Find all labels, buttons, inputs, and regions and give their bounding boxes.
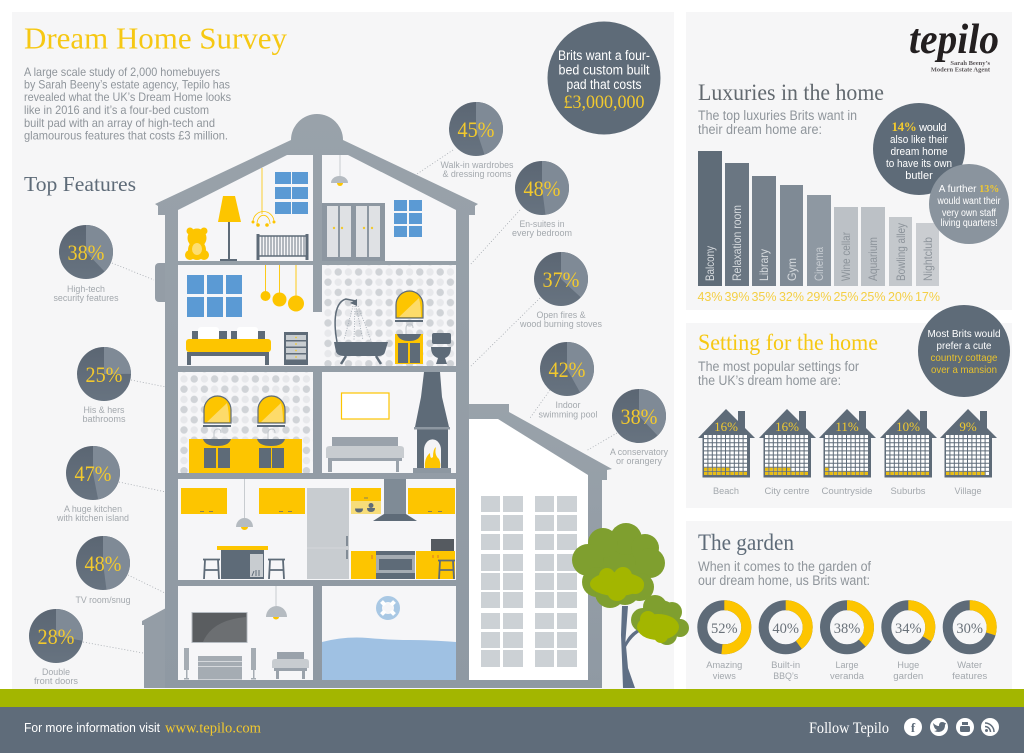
donut: water features: Water	[957, 660, 982, 670]
nursery: window	[275, 172, 308, 214]
tv room: speakers and cabinet	[184, 648, 256, 680]
kitchen: island	[217, 546, 268, 579]
pie: bathrooms: bathrooms	[82, 414, 126, 424]
callout: butler: 14% would	[892, 119, 946, 134]
donut: amazing views: 52%	[711, 621, 738, 637]
house icon: beach	[698, 409, 755, 496]
callout: country cottage	[918, 305, 1010, 397]
pie: swimming pool: 42%	[548, 357, 586, 382]
pie: wardrobes: Walk-in wardrobes	[440, 160, 514, 170]
intro text	[24, 65, 231, 142]
pie: swimming pool: swimming pool	[538, 410, 598, 420]
pie: bathrooms: His & hers	[84, 405, 125, 415]
donut: water features	[948, 605, 992, 681]
intro text: like in 2016 and it’s a four-bed custom	[24, 103, 209, 117]
text: garden intro: our dream home, us Brits want:	[698, 573, 870, 588]
kitchen: wall cabinets	[181, 488, 455, 514]
double bathroom: mirrors	[203, 396, 285, 427]
pie: open fires: Open fires &	[536, 310, 586, 320]
house	[142, 114, 612, 688]
pie: conservatory	[586, 389, 668, 466]
bar chart: luxuries: Wine cellar	[839, 232, 853, 281]
rooms	[178, 155, 456, 680]
logo: tepilo	[909, 17, 999, 63]
tree highlights	[590, 567, 679, 643]
callout: staff quarters	[929, 164, 1009, 244]
tv room: television	[192, 612, 247, 642]
pie: security: 38%	[68, 240, 104, 265]
callout: country cottage: prefer a cute	[936, 340, 992, 352]
pie: kitchen: with kitchen island	[56, 513, 129, 523]
living room: wood burner	[413, 372, 451, 473]
living room: picture	[342, 393, 389, 419]
extension building	[469, 404, 612, 688]
pie: tv room: 48%	[84, 551, 122, 576]
donut: huge garden: 34%	[895, 621, 922, 637]
pie: wardrobes: & dressing rooms	[442, 169, 512, 179]
pie: security	[54, 225, 154, 303]
bar chart: luxuries: 25%	[860, 290, 886, 304]
donut: water features: features	[952, 671, 988, 681]
donut: huge garden: Huge	[897, 660, 919, 670]
donut: bbq	[764, 605, 808, 681]
attic: pendant light	[331, 155, 348, 186]
pie: open fires: 37%	[542, 267, 580, 292]
double bathroom: vanity	[189, 429, 302, 473]
text: setting intro	[698, 359, 859, 388]
pie: kitchen: 47%	[74, 461, 112, 486]
donut: huge garden: garden	[893, 671, 923, 681]
callout: butler	[873, 103, 965, 195]
pie: tv room: TV room/snug	[76, 595, 130, 605]
pie: bathrooms: 25%	[86, 362, 122, 387]
bar chart: luxuries: 25%	[833, 290, 859, 304]
bedroom: hanging lights	[260, 265, 304, 312]
callout: country cottage: over a mansion	[931, 364, 997, 376]
pie: front doors	[29, 609, 143, 686]
text: luxuries intro: their dream home are:	[698, 122, 822, 137]
nursery: cot	[258, 234, 307, 260]
bar chart: luxuries: Nightclub	[921, 237, 935, 281]
pie: wardrobes	[417, 102, 514, 179]
donut: amazing views: Amazing	[706, 660, 742, 670]
bedroom: window	[187, 275, 242, 317]
icon: rss	[981, 718, 999, 736]
tv room: armchair	[272, 652, 309, 679]
annex and alarm box	[142, 263, 169, 688]
donut: bbq: BBQ’s	[773, 671, 799, 681]
bar chart: luxuries: Cinema	[812, 247, 826, 281]
living room: sofa	[326, 437, 404, 472]
bathroom: mirror	[395, 291, 423, 322]
callout: staff quarters: A further 13%	[939, 184, 999, 195]
bar chart: luxuries: 35%	[751, 290, 777, 304]
house icon: countryside: Countryside	[822, 486, 872, 496]
pie: front doors: 28%	[38, 624, 74, 649]
house icon: village	[940, 409, 997, 496]
pie: en-suites: En-suites in	[520, 219, 564, 229]
pie: open fires	[470, 252, 602, 367]
callout: three million: pad that costs	[566, 77, 642, 92]
bar chart: luxuries: Bowling alley	[894, 223, 908, 281]
callout: three million: £3,000,000	[564, 92, 644, 113]
icon: facebook	[904, 718, 922, 736]
pie: front doors: front doors	[34, 676, 79, 686]
text: luxuries intro	[698, 108, 857, 137]
attic: window	[394, 200, 422, 237]
bar chart: luxuries: 20%	[888, 290, 913, 304]
callout: butler: butler	[905, 170, 933, 182]
pie: bathrooms	[77, 347, 166, 424]
donut: bbq: Built-in	[771, 660, 800, 670]
bar chart: luxuries: Gym	[785, 258, 799, 281]
house structure	[155, 114, 478, 688]
bar chart: luxuries	[697, 151, 940, 304]
pie: open fires: wood burning stoves	[519, 319, 602, 329]
intro text: A large scale study of 2,000 homebuyers	[24, 65, 220, 79]
pool: lifebuoy	[379, 599, 397, 617]
pie: kitchen: A huge kitchen	[64, 504, 122, 514]
house icon: countryside: 11%	[835, 419, 859, 434]
panel: garden background	[686, 521, 1012, 690]
text: garden intro: When it comes to the garden of	[698, 559, 871, 574]
bar chart: luxuries: 29%	[806, 290, 832, 304]
nursery: mobile	[252, 168, 276, 227]
footer: follow text: Follow Tepilo	[809, 720, 889, 737]
bar chart: luxuries: Aquarium	[866, 237, 880, 281]
icon: facebook: f	[911, 720, 916, 735]
pie: swimming pool: Indoor	[556, 400, 580, 410]
callout: staff quarters: very own staff	[942, 208, 996, 219]
panel: luxuries background	[686, 12, 1012, 310]
bar chart: luxuries: Relaxation room	[730, 205, 744, 281]
pie: conservatory: A conservatory	[610, 447, 668, 457]
house icon: village: 9%	[959, 419, 977, 434]
donut: amazing views: views	[713, 671, 736, 681]
text: setting intro: The most popular settings for	[698, 359, 859, 374]
bar chart: luxuries: Balcony	[703, 246, 717, 281]
heading: luxuries: Luxuries in the home	[698, 80, 884, 105]
kitchen: fridge	[307, 488, 349, 579]
donut: veranda: 38%	[834, 621, 860, 637]
logo: Modern Estate Agent	[931, 66, 991, 74]
donut: water features: 30%	[956, 621, 983, 637]
callout: country cottage: Most Brits would	[928, 328, 1001, 340]
house icon: beach: 16%	[714, 419, 738, 434]
bedroom: bed	[186, 327, 271, 365]
pie: swimming pool	[530, 342, 598, 420]
kitchen: stools	[203, 560, 285, 579]
callout: three million	[548, 22, 660, 134]
pool: water	[322, 638, 456, 680]
house icon: city centre: 16%	[775, 419, 799, 434]
callout: butler: also like their	[890, 134, 948, 146]
pie: security: High-tech	[67, 284, 105, 294]
heading: top features: Top Features	[24, 172, 136, 196]
intro text: built pad with an array of high-tech and	[24, 116, 215, 130]
callout: three million: Brits want a four-	[558, 48, 650, 63]
bedroom: drawers	[284, 332, 308, 365]
text: garden intro	[698, 559, 871, 588]
house icon: city centre	[759, 409, 816, 496]
pie: front doors: Double	[42, 667, 70, 677]
panel: setting background	[686, 323, 1012, 508]
pie: en-suites	[470, 161, 572, 265]
pie: conservatory: 38%	[620, 404, 658, 429]
heading: setting: Setting for the home	[698, 330, 878, 355]
text: setting intro: the UK’s dream home are:	[698, 373, 841, 388]
nursery: teddy bear	[185, 228, 209, 260]
icon: twitter	[930, 718, 948, 736]
kitchen: oven and units	[351, 539, 455, 579]
bar chart: luxuries: 17%	[915, 290, 940, 304]
donut: veranda: veranda	[830, 671, 864, 681]
house icon: suburbs: Suburbs	[890, 486, 926, 496]
house icon: city centre: City centre	[764, 486, 810, 496]
callout: country cottage: country cottage	[930, 352, 998, 364]
pie: conservatory: or orangery	[616, 456, 662, 466]
bathroom: vanity unit	[395, 324, 423, 364]
callout: staff quarters: living quarters!	[940, 218, 998, 229]
bathroom: bath and shower	[334, 299, 388, 364]
nursery: lamp	[218, 196, 241, 261]
callout: staff quarters: would want their	[937, 196, 1001, 207]
footer: website text	[24, 720, 262, 736]
bar chart: luxuries: 39%	[724, 290, 750, 304]
house icon: suburbs: 10%	[896, 419, 920, 434]
house icon: suburbs	[880, 409, 937, 496]
pie: tv room	[76, 536, 165, 605]
pie: en-suites: 48%	[524, 176, 560, 201]
donut: huge garden	[886, 605, 930, 681]
pie: security: security features	[54, 293, 119, 303]
callout: butler: dream home	[890, 146, 948, 158]
attic: wardrobes	[322, 203, 385, 261]
kitchen: pendant light	[236, 479, 253, 530]
donut: veranda: Large	[836, 660, 858, 670]
callout: butler: to have its own	[886, 158, 952, 170]
footer bar	[0, 707, 1024, 753]
house icon: countryside	[819, 409, 876, 496]
tree foliage	[572, 523, 689, 645]
pie: wardrobes: 45%	[458, 117, 494, 142]
tree	[572, 523, 689, 688]
bar chart: luxuries: 32%	[779, 290, 804, 304]
bar chart: luxuries: 43%	[697, 290, 723, 304]
ground strip	[0, 689, 1024, 707]
text: luxuries intro: The top luxuries Brits want in	[698, 108, 857, 123]
heading: garden: The garden	[698, 530, 794, 555]
donut: veranda	[825, 605, 869, 681]
bar chart: luxuries: Library	[757, 249, 771, 281]
house icon: beach: Beach	[713, 486, 739, 496]
footer: website text: www.tepilo.com	[165, 720, 262, 736]
tv room: pendant light	[266, 586, 287, 620]
title: Dream Home Survey	[24, 20, 287, 56]
pie: kitchen	[56, 446, 166, 523]
house icon: village: Village	[954, 486, 982, 496]
bathroom: toilet	[431, 333, 451, 364]
logo: Sarah Beeny’s	[950, 60, 990, 67]
panel: main survey background	[12, 12, 674, 690]
intro text: by Sarah Beeny’s estate agency, Tepilo has	[24, 78, 230, 92]
intro text: glamourous features that costs £3 million.	[24, 128, 228, 142]
donut: amazing views	[702, 605, 746, 681]
icon: youtube	[956, 718, 974, 736]
footer: website text: For more information visit	[24, 720, 160, 735]
pie: en-suites: every bedroom	[512, 228, 572, 238]
kitchen: extractor hood	[373, 479, 417, 521]
tree trunk	[621, 606, 641, 688]
donut: bbq: 40%	[772, 621, 799, 637]
intro text: revealed what the UK’s Dream Home looks	[24, 90, 231, 104]
callout: three million: bed custom built	[558, 62, 650, 78]
